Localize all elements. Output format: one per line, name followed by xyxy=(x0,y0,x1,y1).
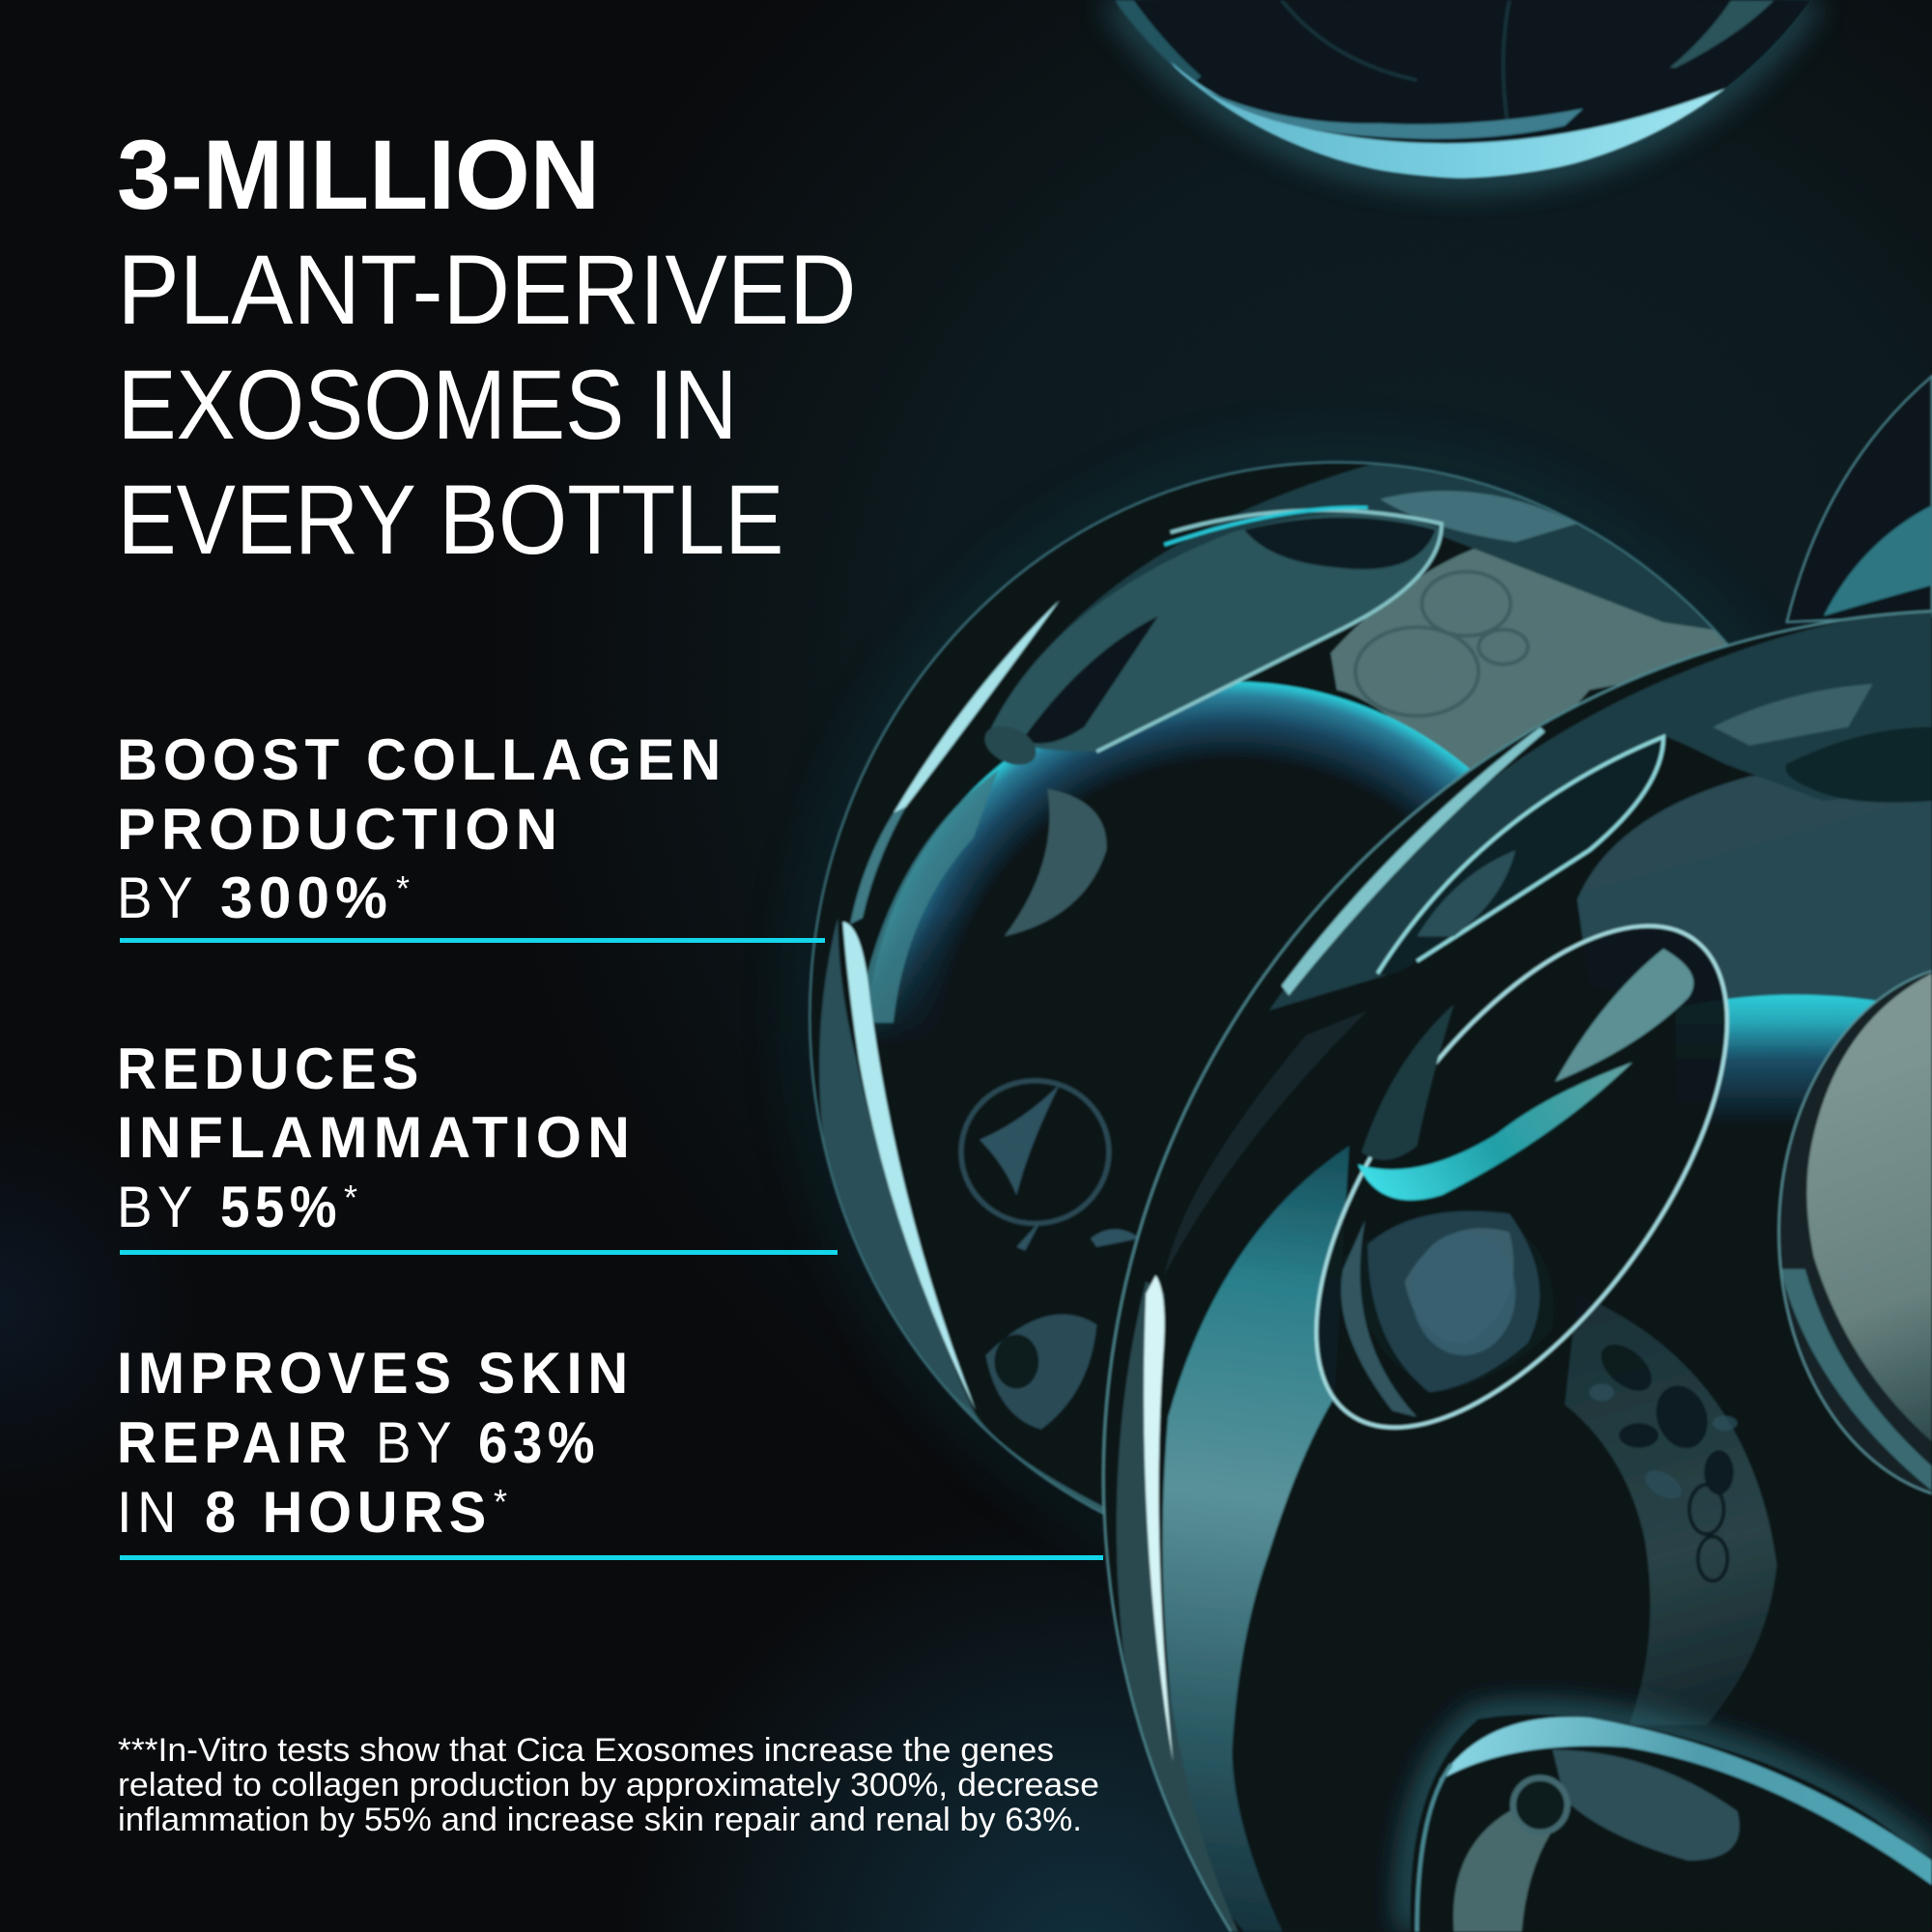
stat: reduces inflammation: INFLAMMATION xyxy=(117,1105,636,1170)
stat: reduces inflammation: 55% xyxy=(220,1175,342,1239)
footnote xyxy=(118,1732,1099,1838)
headline: PLANT-DERIVED xyxy=(118,235,856,345)
dark ellipse top right xyxy=(1785,727,1932,803)
grey inner sphere xyxy=(1329,547,1727,769)
top lens xyxy=(985,513,1441,752)
glowing inner ring sphere xyxy=(871,680,1470,1039)
headline xyxy=(117,120,856,575)
footnote: inflammation by 55% and increase skin repair and renal by 63%. xyxy=(118,1802,1082,1838)
stat: improves skin repair: REPAIR xyxy=(117,1410,353,1475)
lens: center tilted xyxy=(1237,859,1805,1495)
bubble: right grey sphere xyxy=(1779,971,1932,1493)
bubble: large front sphere xyxy=(1103,610,1932,1932)
stat: improves skin repair: IMPROVES SKIN xyxy=(117,1341,634,1406)
bubbles artwork xyxy=(810,0,1932,1932)
stat: improves skin repair: IN xyxy=(117,1480,182,1545)
bottom rim xyxy=(863,1282,1109,1534)
lens cyan crescent xyxy=(1358,1062,1633,1200)
inner bubble lower xyxy=(985,1315,1096,1430)
stat: boost collagen: * xyxy=(396,868,410,908)
stat: improves skin repair xyxy=(117,1341,1103,1560)
stat: improves skin repair: 8 HOURS xyxy=(205,1480,492,1545)
top band xyxy=(1269,610,1932,1010)
bubble: top-right small xyxy=(1786,376,1932,622)
stat: improves skin repair: BY xyxy=(376,1410,457,1475)
stat: reduces inflammation: REDUCES xyxy=(117,1037,424,1101)
bright left streak xyxy=(842,922,976,1410)
stat: reduces inflammation: * xyxy=(344,1178,357,1217)
top-left streak xyxy=(894,600,1060,813)
stat: reduces inflammation xyxy=(117,1037,838,1255)
stat: boost collagen: BOOST COLLAGEN xyxy=(117,727,726,792)
front rim band xyxy=(1117,1282,1238,1932)
big teal crescent xyxy=(1163,1146,1350,1932)
stat: reduces inflammation: BY xyxy=(117,1175,198,1239)
stat: boost collagen: BY xyxy=(117,866,198,930)
upper cap band xyxy=(1057,464,1714,638)
teal left arc xyxy=(856,770,998,1023)
top dark lens xyxy=(1378,737,1663,975)
stat: boost collagen xyxy=(117,727,825,943)
grey sphere rings xyxy=(1355,572,1528,716)
footnote: related to collagen production by approximately 300%, decrease xyxy=(118,1767,1099,1804)
stat: improves skin repair: 63% xyxy=(478,1410,600,1475)
footnote: ***In-Vitro tests show that Cica Exosomes increase the genes xyxy=(118,1732,1054,1769)
headline: EVERY BOTTLE xyxy=(118,465,784,575)
lens blue blob xyxy=(1343,1213,1554,1392)
tube ring behind lens xyxy=(1565,1293,1776,1725)
headline: EXOSOMES IN xyxy=(118,350,738,460)
bubble: bottom xyxy=(1410,1715,1932,1932)
stat: boost collagen: PRODUCTION xyxy=(117,797,563,862)
cyan band with fade xyxy=(1676,995,1897,1133)
left rim band xyxy=(819,918,974,1410)
bubble: top crescent xyxy=(1114,0,1811,179)
stat: boost collagen: 300% xyxy=(220,866,393,930)
teal upper fill xyxy=(1577,764,1932,1023)
grey crescent xyxy=(1005,788,1107,936)
headline: 3-MILLION xyxy=(117,120,600,230)
bright rim streak xyxy=(1144,1275,1173,1762)
bubble: large left sphere xyxy=(806,459,1735,1532)
stat: improves skin repair: * xyxy=(494,1482,507,1521)
rim highlight xyxy=(1282,727,1545,996)
inner bubble upper xyxy=(961,1081,1109,1224)
